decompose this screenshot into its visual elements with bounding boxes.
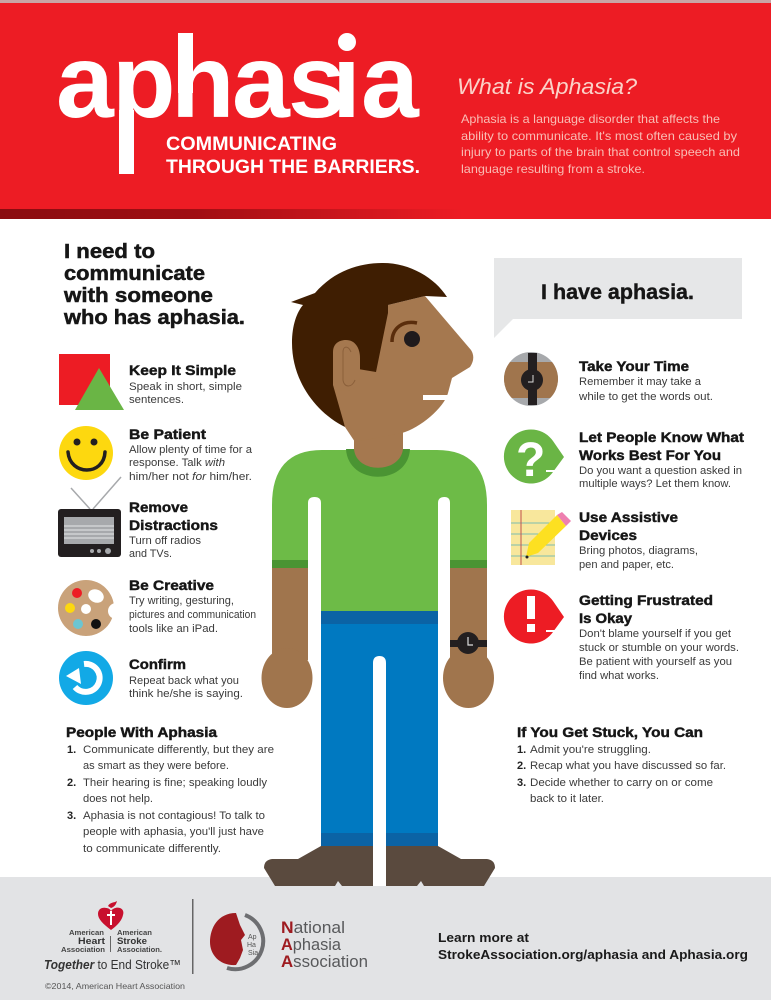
text block: if you get stuck xyxy=(517,724,726,805)
logo: National Aphasia Association: Association xyxy=(281,952,368,971)
text block: if you get stuck: 3. xyxy=(517,777,526,789)
figure: arms and hands xyxy=(262,560,494,708)
tip: getting frustrated: stuck or stumble on your words. xyxy=(579,642,739,654)
tip: be patient: Be Patient xyxy=(129,426,206,442)
icon: smiley face xyxy=(59,426,113,480)
definition text: injury to parts of the brain that control speech and xyxy=(461,145,740,159)
copyright: ©2014, American Heart Association xyxy=(45,981,185,991)
text block: if you get stuck: back to it later. xyxy=(530,793,604,805)
tip: let people know: Works Best For You xyxy=(579,447,721,463)
left heading xyxy=(63,241,245,329)
text block: people with aphasia: 2. xyxy=(67,777,76,789)
tip: be patient: him/her not for him/her. xyxy=(129,471,252,483)
text block: people with aphasia: 3. xyxy=(67,810,76,822)
text block: if you get stuck: Decide whether to carry on or come xyxy=(530,777,713,789)
title: aphasia: aphasia xyxy=(56,24,420,140)
text block: people with aphasia: People With Aphasia xyxy=(66,724,217,740)
left heading: communicate xyxy=(64,263,205,285)
icon: profile head: Ha xyxy=(247,942,256,949)
figure: person with aphasia xyxy=(262,263,495,886)
tip: be creative: tools like an iPad. xyxy=(129,623,218,635)
tip: remove distractions: and TVs. xyxy=(129,548,172,560)
figure: wristwatch xyxy=(450,632,487,654)
tip: remove distractions: Turn off radios xyxy=(129,535,201,547)
text block: if you get stuck: 1. xyxy=(517,744,526,756)
figure: hair xyxy=(291,263,447,427)
icon: question mark speech head xyxy=(504,430,564,487)
logo: National Aphasia Association: National xyxy=(281,918,345,937)
text block: people with aphasia: Communicate differently, but they are xyxy=(83,744,274,756)
tip: remove distractions: Distractions xyxy=(129,517,218,533)
text block: people with aphasia: 1. xyxy=(67,744,76,756)
tip: be creative: pictures and communication xyxy=(129,609,256,621)
logo: American Heart and Stroke Association: Heart xyxy=(78,936,105,946)
tip: getting frustrated: find what works. xyxy=(579,670,659,682)
divider xyxy=(192,899,194,974)
tip: confirm: Repeat back what you xyxy=(129,675,239,687)
icon: heart and torch xyxy=(98,901,123,930)
logo: National Aphasia Association xyxy=(210,913,368,971)
subtitle xyxy=(166,134,420,178)
logo: American Heart and Stroke Association: American xyxy=(69,928,104,937)
tip: be creative: Be Creative xyxy=(129,577,214,593)
tip: getting frustrated: Is Okay xyxy=(579,610,632,626)
tip: keep it simple: Keep It Simple xyxy=(129,362,236,378)
tip: getting frustrated: Be patient with yourself as you xyxy=(579,656,732,668)
speech bubble: I have aphasia: I have aphasia. xyxy=(541,281,694,304)
definition text: language resulting from a stroke. xyxy=(461,162,645,176)
text block: people with aphasia: does not help. xyxy=(83,793,153,805)
panel: tips for communicating xyxy=(58,354,256,705)
tip: getting frustrated: Don't blame yourself if you get xyxy=(579,628,731,640)
tip: keep it simple: sentences. xyxy=(129,394,184,406)
tip: be patient: Allow plenty of time for a xyxy=(129,444,253,456)
icon: wristwatch on arm xyxy=(504,352,558,406)
figure: green shirt xyxy=(272,425,487,611)
definition text xyxy=(461,112,740,176)
logo: American Heart and Stroke Association: American xyxy=(117,928,152,937)
tip: let people know: Do you want a question asked in xyxy=(579,465,742,477)
figure: head xyxy=(291,263,473,442)
text block: people with aphasia: to communicate differently. xyxy=(83,843,221,855)
left heading: with someone xyxy=(63,285,213,307)
text block: if you get stuck: If You Get Stuck, You Can xyxy=(517,724,703,740)
figure: shoes xyxy=(264,846,495,886)
subtitle: COMMUNICATING xyxy=(166,134,337,155)
text block: if you get stuck: Recap what you have discussed so far. xyxy=(530,760,726,772)
logo: American Heart and Stroke Association: Stroke xyxy=(117,936,147,946)
figure: trousers xyxy=(321,611,438,846)
tip: use assistive devices xyxy=(579,509,698,571)
icon: notepad and pencil xyxy=(511,510,571,565)
left heading: who has aphasia. xyxy=(63,307,245,329)
tip: use assistive devices: Devices xyxy=(579,527,637,543)
tip: getting frustrated: Getting Frustrated xyxy=(579,592,713,608)
logo: American Heart and Stroke Association xyxy=(44,901,181,972)
tip: take your time: while to get the words out. xyxy=(578,391,713,403)
definition text: Aphasia is a language disorder that affects the xyxy=(461,112,720,126)
panel: tips for people with aphasia xyxy=(504,352,744,682)
footer band xyxy=(0,877,771,1000)
text block: people with aphasia: Aphasia is not contagious! To talk to xyxy=(83,810,265,822)
learn more text: StrokeAssociation.org/aphasia and Aphasia.org xyxy=(438,947,748,962)
icon: circular arrow xyxy=(59,651,113,705)
header banner xyxy=(0,0,771,219)
tip: keep it simple xyxy=(129,362,242,406)
tip: let people know xyxy=(579,429,744,490)
logo: American Heart and Stroke Association: Together to End Stroke™ xyxy=(44,957,181,972)
figure: mouth xyxy=(423,395,448,400)
icon: profile head: Ap xyxy=(248,934,257,941)
tip: take your time: Take Your Time xyxy=(579,358,689,374)
definition text: ability to communicate. It's most often caused by xyxy=(461,129,737,143)
tip: let people know: multiple ways? Let them know. xyxy=(579,478,731,490)
left heading: I need to xyxy=(64,241,155,263)
tip: be patient: response. Talk with xyxy=(129,457,225,469)
icon: television xyxy=(58,477,121,557)
figure: eyebrow xyxy=(392,322,417,342)
subtitle: THROUGH THE BARRIERS. xyxy=(166,157,420,178)
text block: if you get stuck: Admit you're struggling. xyxy=(530,744,651,756)
icon: profile head xyxy=(210,913,263,969)
figure: leg gap over footer xyxy=(373,877,386,886)
icon: profile head: Sia xyxy=(248,950,258,957)
tip: be patient xyxy=(129,426,253,483)
text block: people with aphasia: people with aphasia, you'll just have xyxy=(83,826,264,838)
icon: question mark speech head: ? xyxy=(516,434,545,487)
tip: take your time xyxy=(578,358,713,403)
tip: use assistive devices: Bring photos, diagrams, xyxy=(579,545,698,557)
tip: confirm: think he/she is saying. xyxy=(129,688,243,700)
logo: National Aphasia Association: Aphasia xyxy=(281,935,342,954)
tip: confirm xyxy=(129,656,243,700)
logo: American Heart and Stroke Association: Association xyxy=(61,945,105,954)
tip: be creative xyxy=(129,577,256,635)
tip: keep it simple: Speak in short, simple xyxy=(129,381,242,393)
speech bubble: I have aphasia xyxy=(494,258,742,338)
figure: ear xyxy=(333,340,360,391)
text block: if you get stuck: 2. xyxy=(517,760,526,772)
text block: people with aphasia: Their hearing is fine; speaking loudly xyxy=(83,777,268,789)
heading: What is Aphasia?: What is Aphasia? xyxy=(457,74,638,99)
tip: use assistive devices: pen and paper, etc. xyxy=(579,559,674,571)
text block: people with aphasia: as smart as they were before. xyxy=(83,760,229,772)
learn more text xyxy=(438,930,748,962)
icon: paint palette xyxy=(58,580,124,636)
tip: remove distractions xyxy=(129,499,218,560)
tip: confirm: Confirm xyxy=(129,656,186,672)
icon: square and triangle xyxy=(59,354,124,410)
tip: use assistive devices: Use Assistive xyxy=(579,509,678,525)
text block: people with aphasia xyxy=(66,724,274,855)
tip: take your time: Remember it may take a xyxy=(579,376,702,388)
icon: exclamation speech head xyxy=(504,590,564,644)
tip: let people know: Let People Know What xyxy=(579,429,744,445)
learn more text: Learn more at xyxy=(438,930,530,945)
tip: getting frustrated xyxy=(579,592,739,682)
logo: American Heart and Stroke Association: Association. xyxy=(117,945,162,954)
tip: be creative: Try writing, gesturing, xyxy=(129,595,234,607)
tip: remove distractions: Remove xyxy=(129,499,188,515)
figure: eye xyxy=(404,331,420,347)
